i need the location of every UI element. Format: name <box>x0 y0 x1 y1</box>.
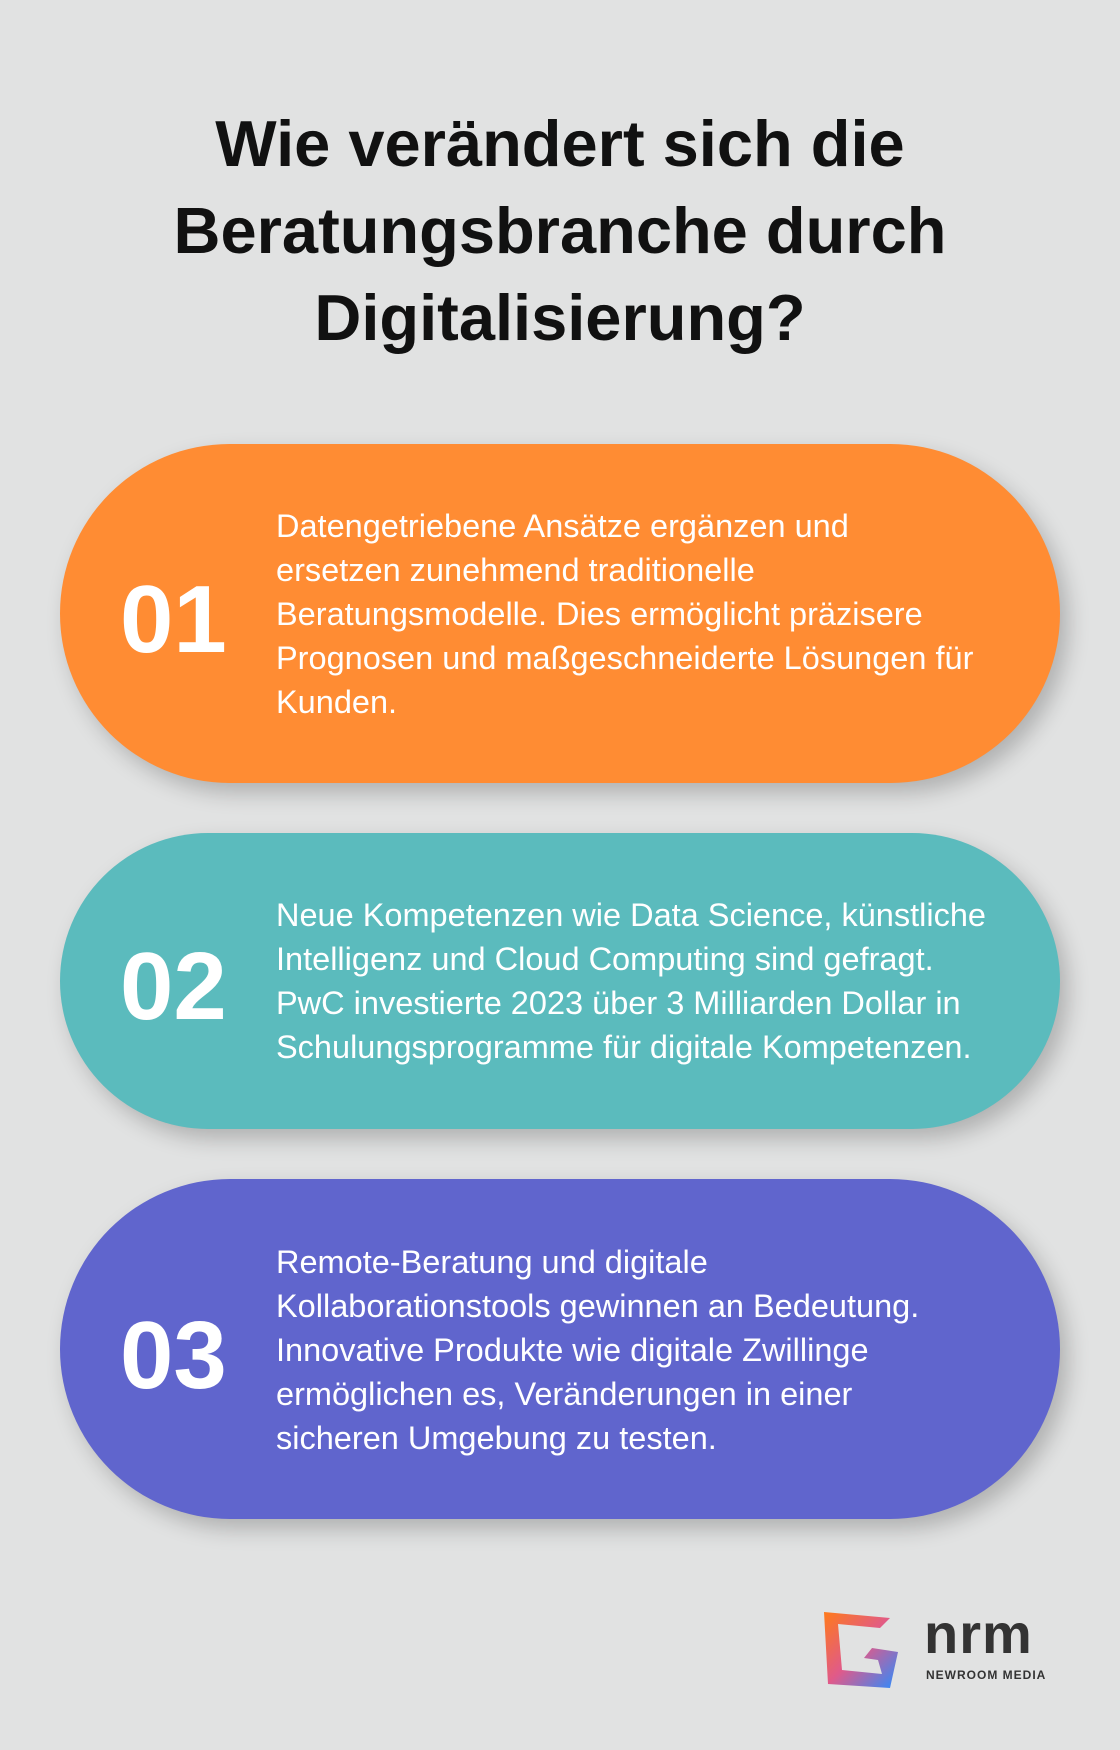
text 01: ersetzen zunehmend traditionelle <box>276 552 755 588</box>
text 01 <box>276 508 973 720</box>
text 03: Innovative Produkte wie digitale Zwillinge <box>276 1332 869 1368</box>
text 03 <box>276 1244 919 1456</box>
panel: 03 <box>60 1179 1060 1519</box>
number 03: 03 <box>120 1302 227 1409</box>
title: Wie verändert sich die <box>215 107 905 180</box>
icon: logo mark <box>824 1612 898 1688</box>
text 02: Neue Kompetenzen wie Data Science, künstliche <box>276 897 986 933</box>
panel: 01 <box>60 444 1060 783</box>
text 03: Remote-Beratung und digitale <box>276 1244 708 1280</box>
text 03: Kollaborationstools gewinnen an Bedeutung. <box>276 1288 919 1324</box>
text 01: Kunden. <box>276 684 397 720</box>
text 02: Schulungsprogramme für digitale Kompetenzen. <box>276 1029 972 1065</box>
title <box>174 107 946 354</box>
text 01: Prognosen und maßgeschneiderte Lösungen für <box>276 640 973 676</box>
number 01: 01 <box>120 566 227 673</box>
title: Beratungsbranche durch <box>174 194 946 267</box>
logo <box>824 1602 1046 1688</box>
logo: NEWROOM MEDIA <box>926 1668 1046 1682</box>
text 03: sicheren Umgebung zu testen. <box>276 1420 717 1456</box>
title: Digitalisierung? <box>314 281 806 354</box>
text 02: PwC investierte 2023 über 3 Milliarden Dollar in <box>276 985 961 1021</box>
text 01: Beratungsmodelle. Dies ermöglicht präzisere <box>276 596 923 632</box>
logo text: nrm <box>924 1602 1033 1665</box>
text 02: Intelligenz und Cloud Computing sind gefragt. <box>276 941 934 977</box>
panel: 02 <box>60 833 1060 1129</box>
text 01: Datengetriebene Ansätze ergänzen und <box>276 508 849 544</box>
text 03: ermöglichen es, Veränderungen in einer <box>276 1376 852 1412</box>
text 02 <box>276 897 986 1065</box>
number 02: 02 <box>120 933 227 1040</box>
